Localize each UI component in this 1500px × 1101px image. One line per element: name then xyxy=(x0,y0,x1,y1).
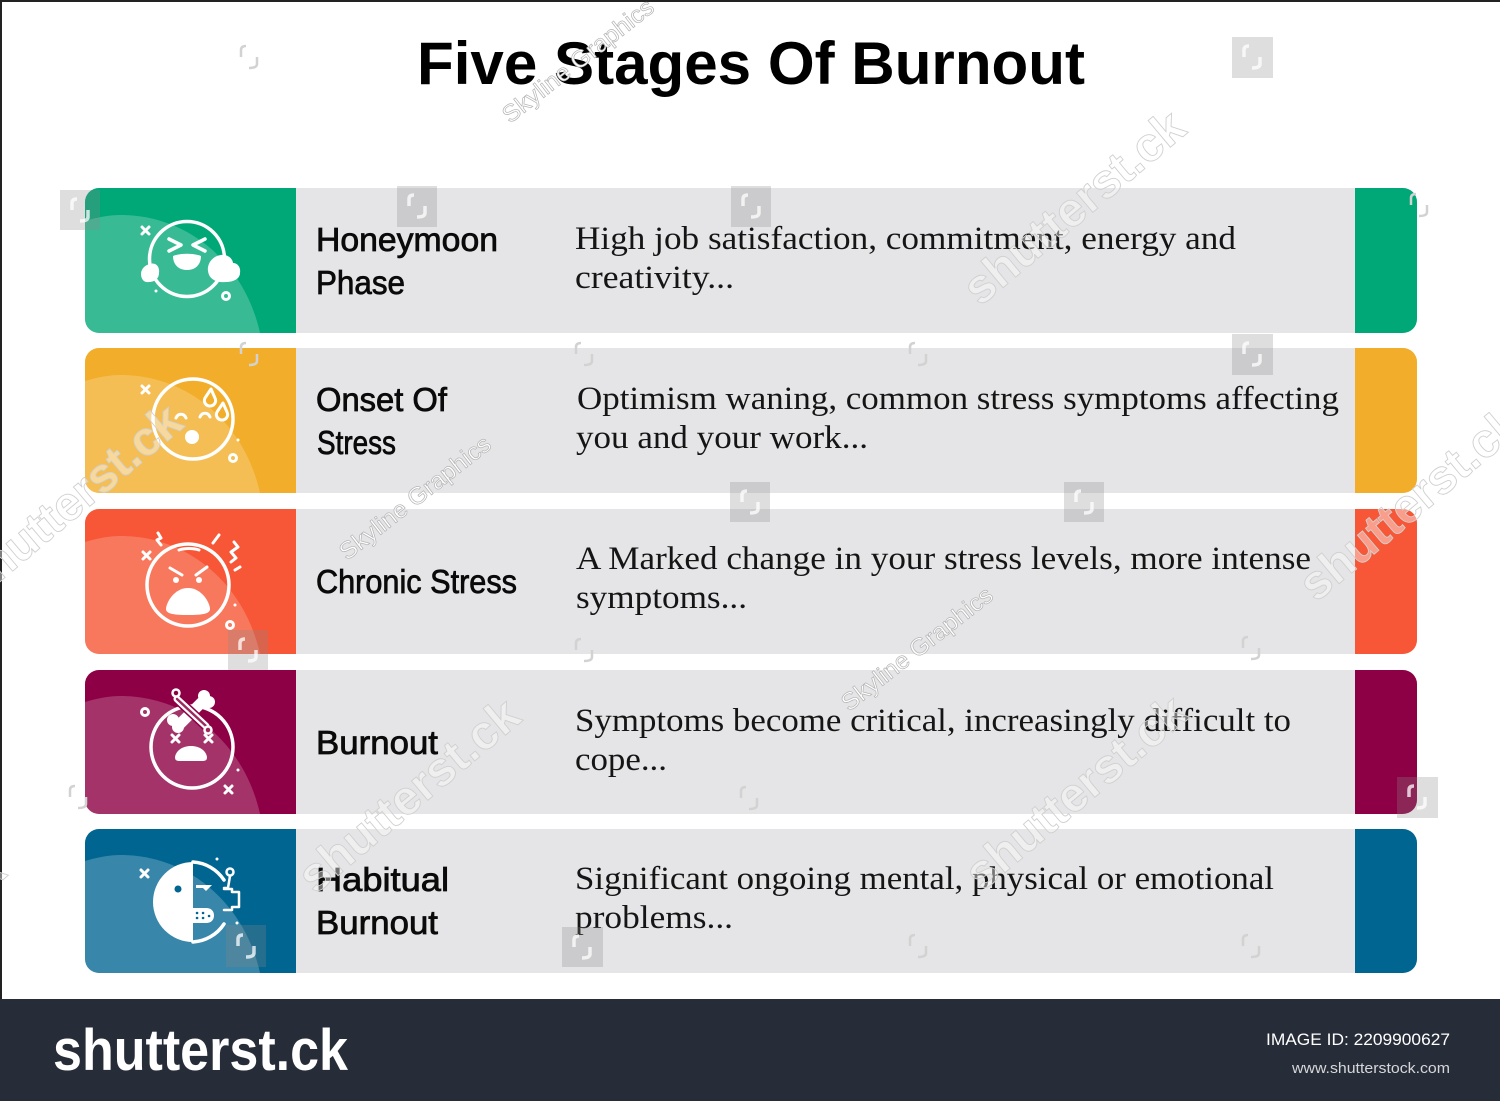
panel: honeymoon phase xyxy=(85,188,1417,333)
watermark overlay: shutterst.ck xyxy=(955,685,1198,900)
panel: burnout xyxy=(85,670,1417,814)
label: honeymoon phase: Phase xyxy=(316,264,405,301)
shutterstock logo: shutterst.ck xyxy=(53,1018,349,1083)
label: onset of stress: Stress xyxy=(317,424,396,461)
watermark overlay: shutterst.ck xyxy=(953,100,1196,315)
label: honeymoon phase: Honeymoon xyxy=(316,221,498,258)
description: honeymoon phase: High job satisfaction, commitment, energy and xyxy=(575,221,1237,257)
description: onset of stress: you and your work... xyxy=(576,420,868,456)
icon: half robot face xyxy=(141,858,239,942)
panel: onset of stress xyxy=(85,348,1417,493)
description: honeymoon phase: creativity... xyxy=(575,260,734,296)
description: chronic stress: A Marked change in your stress levels, more intense xyxy=(576,541,1311,577)
label: chronic stress: Chronic Stress xyxy=(316,563,517,600)
panel: chronic stress xyxy=(85,509,1417,654)
watermark overlay: Skyline Graphics xyxy=(497,0,659,129)
description: habitual burnout: Significant ongoing mental, physical or emotional xyxy=(575,861,1274,897)
watermark overlay: shutterst.ck xyxy=(288,688,531,903)
description: burnout: cope... xyxy=(575,742,667,778)
label: habitual burnout: Burnout xyxy=(316,904,438,941)
label: habitual burnout: Habitual xyxy=(316,861,449,898)
description: onset of stress: Optimism waning, common stress symptoms affecting xyxy=(577,381,1339,417)
description: habitual burnout: problems... xyxy=(575,900,733,936)
watermark overlay: Skyline Graphics xyxy=(334,431,496,566)
description: burnout: Symptoms become critical, increasingly difficult to xyxy=(575,703,1291,739)
title: Five Stages Of Burnout xyxy=(417,30,1085,97)
label: burnout: Burnout xyxy=(316,724,438,761)
label: onset of stress: Onset Of xyxy=(316,381,448,418)
footer bar xyxy=(0,999,1500,1101)
description: chronic stress: symptoms... xyxy=(576,580,747,616)
icon: worried sweating face xyxy=(142,379,240,462)
image id: IMAGE ID: 2209900627 xyxy=(1266,1030,1450,1049)
watermark overlay: Skyline Graphics xyxy=(836,582,998,717)
website: www.shutterstock.com xyxy=(1291,1060,1450,1077)
icon: crossed bones dizzy face xyxy=(142,690,240,793)
icon: angry shouting face xyxy=(143,533,240,628)
icon: laughing face xyxy=(141,222,240,300)
panel: habitual burnout xyxy=(85,829,1417,973)
